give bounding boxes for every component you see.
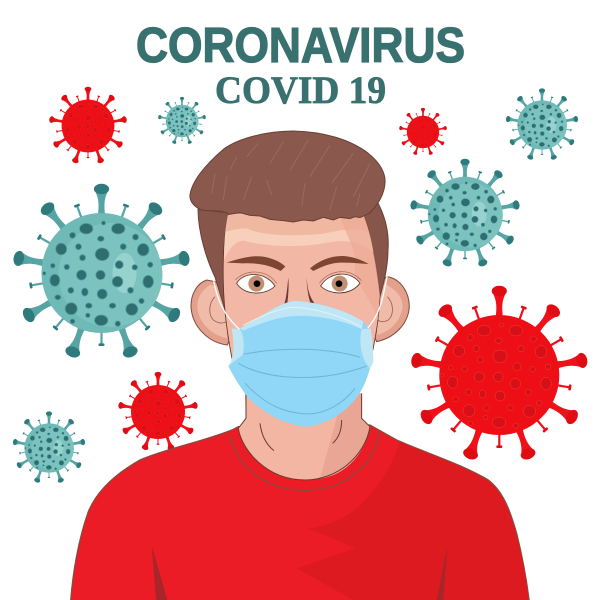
right eyebrow [310, 256, 369, 271]
hair top [190, 131, 385, 222]
left eye [235, 272, 277, 293]
icon: teal virus lower left [12, 411, 86, 483]
icon: small teal virus top [158, 97, 206, 144]
right eye [319, 272, 361, 293]
icon: teal virus top right [505, 88, 579, 160]
mask straps [213, 275, 387, 331]
back hair sides [198, 203, 388, 310]
person wearing mask [71, 131, 529, 600]
head [190, 131, 409, 427]
red t-shirt [71, 425, 529, 600]
nose lines [284, 277, 315, 304]
icon: red virus top left [49, 87, 127, 164]
left ear [191, 280, 235, 345]
icon: large teal virus left [12, 184, 191, 359]
neck [238, 393, 370, 480]
icon: large red virus right [410, 286, 588, 461]
icon: teal virus right [410, 159, 520, 268]
right ear [370, 277, 409, 342]
icon: red virus lower left [118, 372, 198, 451]
face [223, 210, 380, 365]
surgical mask [228, 301, 373, 427]
left eyebrow [227, 256, 285, 271]
title: CORONAVIRUS: CORONAVIRUS [136, 19, 465, 73]
subtitle: COVID 19: COVID 19 [215, 69, 386, 112]
icon: small red virus top right [399, 108, 447, 155]
